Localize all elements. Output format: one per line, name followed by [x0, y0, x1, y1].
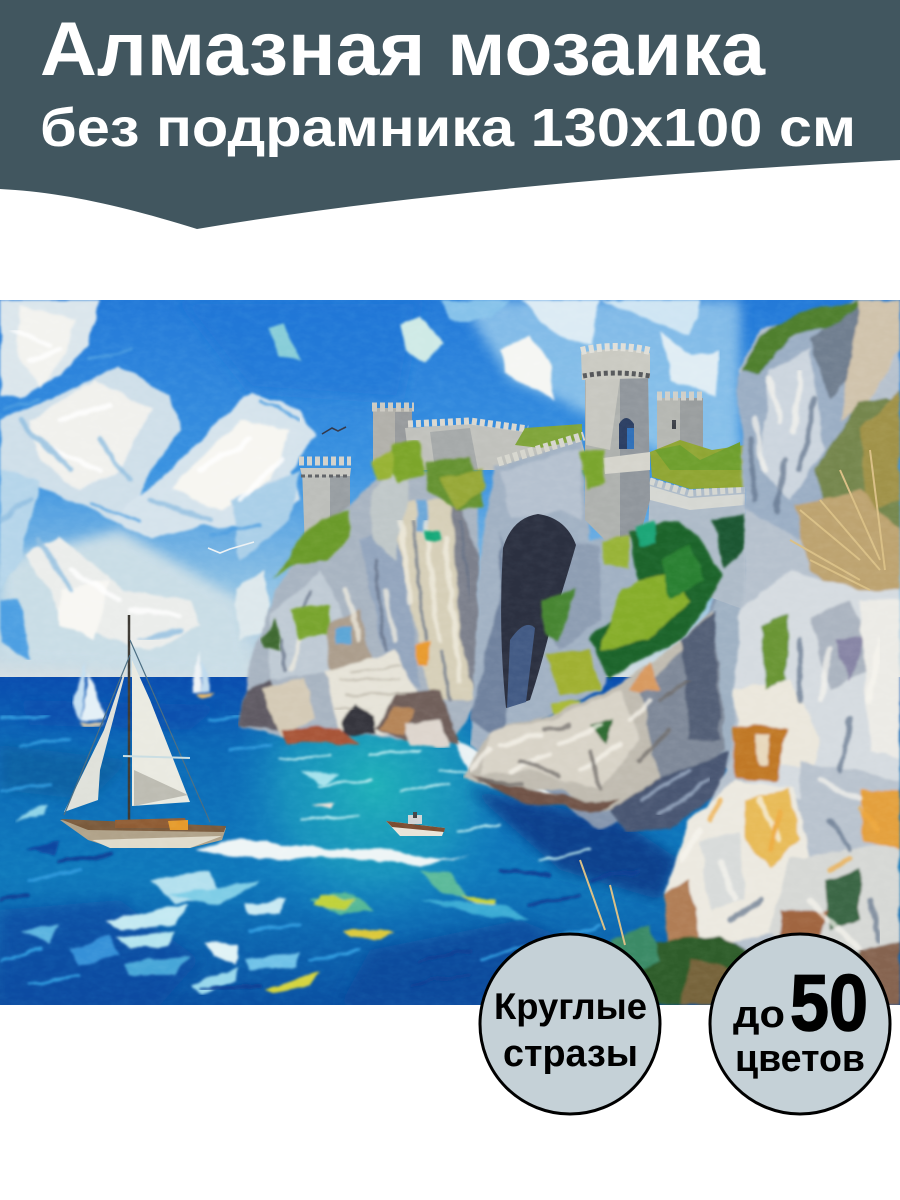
title: Алмазная мозаика — [40, 7, 766, 92]
clouds — [0, 300, 720, 660]
dry grass — [580, 450, 885, 945]
painting: castle on cliffs by the sea — [0, 300, 900, 1005]
wave brush strokes — [0, 715, 640, 990]
right cliff — [610, 300, 900, 1005]
left cliff brush strokes — [280, 520, 470, 710]
sky — [0, 300, 900, 680]
far cliff behind castle — [544, 556, 746, 830]
far tower — [657, 396, 703, 458]
badge: up to 50 colours — [710, 934, 890, 1114]
main sailboat — [60, 615, 226, 848]
big tower — [581, 347, 650, 540]
wall battlements — [498, 436, 584, 462]
badge: up to 50 colours: цветов — [735, 1038, 865, 1080]
sea foam and wave strokes — [15, 740, 610, 995]
right cliff brush strokes — [680, 370, 880, 950]
badge: round rhinestones: стразы — [503, 1033, 638, 1075]
sea — [0, 677, 900, 1005]
left cliff — [238, 465, 480, 748]
rock brush strokes — [470, 680, 710, 815]
great arch cave — [501, 514, 576, 708]
header banner — [0, 0, 900, 229]
badge: round rhinestones: Круглые — [494, 986, 647, 1027]
subtitle: без подрамника 130х100 см — [40, 98, 856, 158]
badge: up to 50 colours: до — [733, 994, 785, 1036]
wall right of big tower — [648, 440, 745, 610]
distant sailboats — [72, 650, 216, 727]
lower right rock — [463, 610, 730, 832]
badge: round rhinestones — [480, 934, 660, 1114]
foliage on castle and cliffs — [260, 440, 748, 720]
left tower — [299, 456, 351, 535]
badge: up to 50 colours: 50 — [790, 958, 868, 1047]
small motor boat — [386, 812, 445, 836]
cloud brush strokes — [0, 330, 300, 640]
seagulls — [208, 427, 346, 553]
main wall with great arch — [470, 440, 650, 770]
paint grain texture — [0, 300, 900, 1005]
back towers and walls — [372, 407, 590, 470]
